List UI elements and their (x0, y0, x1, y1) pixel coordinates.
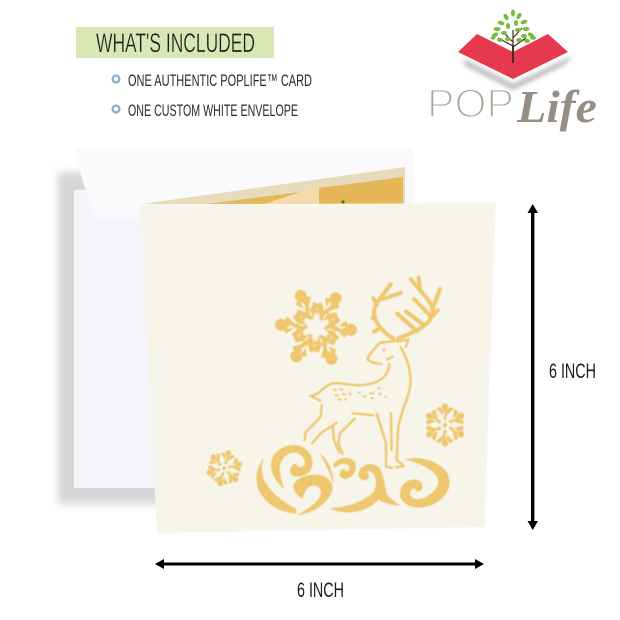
heading: what's included: WHAT'S INCLUDED (96, 28, 255, 58)
logo book shape (458, 34, 568, 79)
item: envelope (113, 101, 298, 120)
logo shadow (462, 56, 572, 90)
card cut-out artwork (200, 278, 468, 515)
antlers (373, 278, 440, 338)
logo wordmark pop: POP (427, 82, 514, 126)
logo wordmark life: Life (516, 81, 597, 132)
item: poplife card: ONE AUTHENTIC POPLIFE™ CARD (128, 71, 312, 90)
deer spots (334, 388, 386, 399)
deer (305, 278, 440, 468)
logo tree (490, 10, 536, 63)
cloud scroll base (257, 445, 450, 515)
envelope flap (76, 148, 413, 219)
included items list (113, 71, 312, 120)
height arrow (528, 204, 538, 530)
right snowflake (422, 403, 468, 447)
item: poplife card (113, 71, 312, 90)
height label: 6 INCH (549, 360, 596, 383)
envelope body (74, 190, 413, 488)
card interior peeking out (142, 167, 405, 204)
item: envelope: ONE CUSTOM WHITE ENVELOPE (128, 101, 298, 120)
card front (140, 203, 496, 533)
width label: 6 INCH (297, 579, 344, 602)
heading: what's included (76, 27, 274, 58)
large snowflake (274, 285, 358, 370)
width arrow (155, 559, 484, 569)
left snowflake (200, 445, 248, 491)
envelope (58, 148, 413, 504)
envelope shadow (58, 172, 358, 504)
logo: poplife (427, 10, 597, 132)
body outline (305, 339, 410, 468)
